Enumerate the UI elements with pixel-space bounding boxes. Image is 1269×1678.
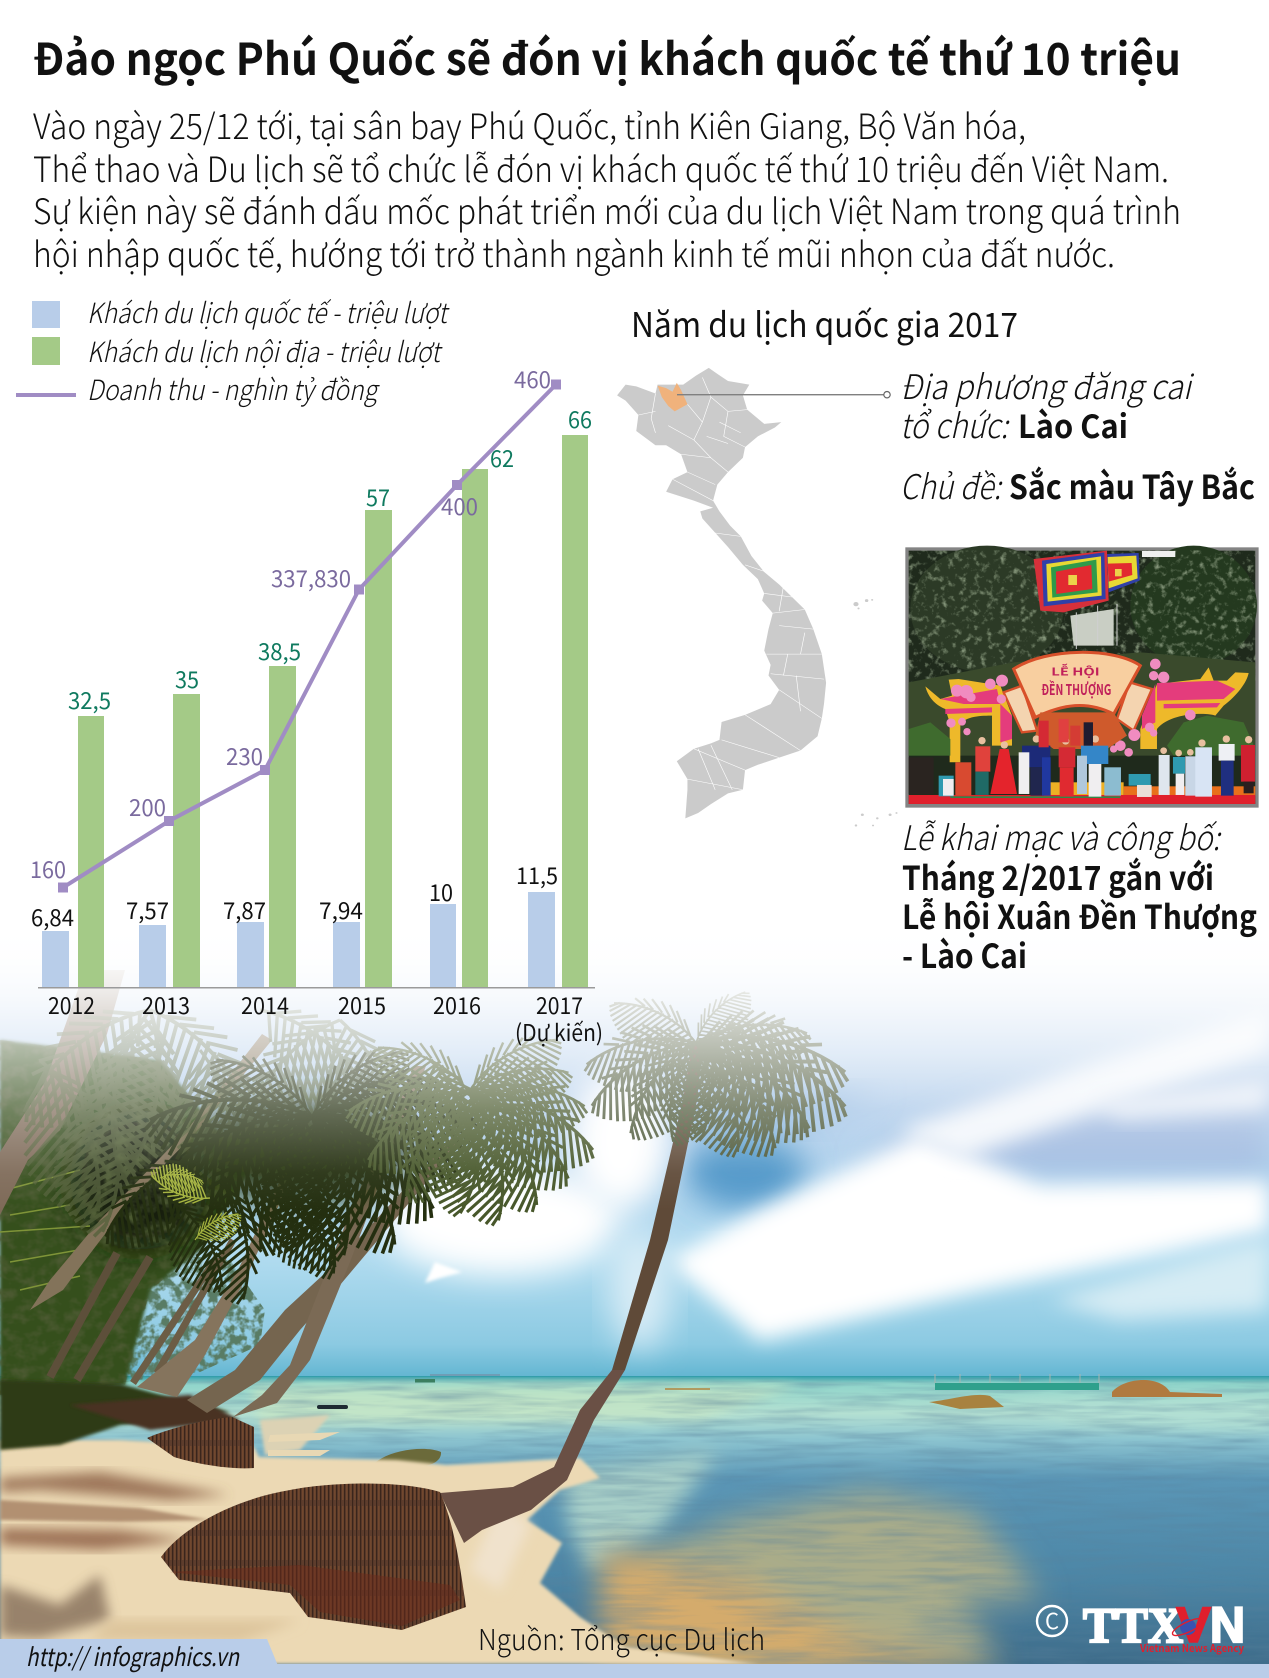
international labels: 7,87 bbox=[223, 892, 266, 926]
year labels: 2014 bbox=[241, 987, 289, 1021]
intro paragraph: hội nhập quốc tế, hướng tới trở thành ngành kinh tế mũi nhọn của đất nước. bbox=[33, 227, 1115, 278]
international labels: 10 bbox=[429, 874, 453, 908]
palm trunks bbox=[0, 970, 703, 1543]
domestic labels: 38,5 bbox=[258, 633, 301, 667]
beach sand bbox=[0, 1415, 760, 1664]
festival gate: ĐỀN THƯỢNG bbox=[1041, 679, 1111, 700]
year labels: 2015 bbox=[338, 987, 386, 1021]
TTXVN logo: N bbox=[1210, 1597, 1245, 1653]
theme text: Chủ đề: bbox=[900, 460, 1003, 509]
intro paragraph bbox=[33, 99, 1181, 278]
domestic labels: 62 bbox=[490, 440, 514, 474]
revenue labels: 337,830 bbox=[271, 560, 351, 594]
map landmass bbox=[617, 368, 826, 818]
opening ceremony text: - Lào Cai bbox=[902, 930, 1027, 978]
white fade into the page bbox=[0, 900, 1269, 1220]
website tab: http:// infographics.vn bbox=[26, 1638, 240, 1674]
chart legend bbox=[16, 292, 450, 409]
international labels: 11,5 bbox=[516, 857, 558, 891]
sky bbox=[0, 900, 1269, 1380]
year labels: 2017 bbox=[536, 987, 583, 1021]
revenue labels: 460 bbox=[514, 361, 551, 395]
heading: national tourism year: Năm du lịch quốc gia 2017 bbox=[631, 298, 1018, 347]
performers and red stage bbox=[909, 719, 1255, 804]
revenue labels: 400 bbox=[441, 488, 478, 522]
host province text bbox=[900, 360, 1195, 448]
revenue line bbox=[58, 380, 561, 892]
map of Vietnam bbox=[617, 368, 898, 827]
festival gate bbox=[909, 652, 1255, 762]
year labels bbox=[48, 987, 603, 1048]
year labels: (Dự kiến) bbox=[515, 1014, 603, 1048]
domestic labels: 57 bbox=[366, 479, 390, 513]
host province text: Địa phương đăng cai bbox=[900, 360, 1195, 409]
host province text: tổ chức: bbox=[900, 399, 1010, 448]
legend: revenue: Doanh thu - nghìn tỷ đồng bbox=[87, 369, 380, 409]
theme text bbox=[900, 460, 1255, 509]
TTXVN logo bbox=[1037, 1597, 1245, 1656]
opening ceremony text: Tháng 2/2017 gắn với bbox=[902, 852, 1214, 900]
TTXVN logo: Vietnam News Agency bbox=[1139, 1641, 1244, 1656]
source footer band bbox=[0, 1664, 1269, 1678]
domestic labels: 35 bbox=[175, 661, 199, 695]
revenue labels bbox=[30, 361, 551, 885]
rocks bbox=[317, 1379, 1222, 1467]
left forest bbox=[0, 1040, 270, 1450]
host province text: Lào Cai bbox=[1018, 402, 1128, 448]
festival photo bbox=[905, 546, 1259, 808]
blue bars: international visitors bbox=[42, 892, 555, 988]
root mounds bbox=[147, 1417, 466, 1630]
domestic labels bbox=[68, 401, 592, 716]
combo chart: visitors and revenue 2012-2017 bbox=[30, 361, 603, 1048]
TTXVN logo: C bbox=[1045, 1604, 1059, 1636]
festival gate: LỄ HỘI bbox=[1051, 663, 1100, 679]
international labels: 7,94 bbox=[319, 892, 363, 926]
background: Phu Quoc beach photo bbox=[0, 900, 1269, 1678]
crown: left, washed bbox=[0, 985, 433, 1242]
TTXVN logo: V bbox=[1176, 1597, 1212, 1653]
x axis bbox=[38, 987, 595, 988]
domestic labels: 32,5 bbox=[68, 682, 111, 716]
international labels: 6,84 bbox=[31, 899, 74, 933]
crown: right of centre bbox=[347, 1013, 608, 1235]
domestic labels: 66 bbox=[568, 401, 592, 435]
revenue labels: 230 bbox=[226, 738, 263, 772]
trees and sky bbox=[909, 546, 1257, 756]
intro paragraph: Vào ngày 25/12 tới, tại sân bay Phú Quốc, tỉnh Kiên Giang, Bộ Văn hóa, bbox=[33, 99, 1026, 150]
international labels: 7,57 bbox=[126, 892, 169, 926]
islands bbox=[853, 599, 898, 827]
green bars: domestic visitors bbox=[78, 435, 588, 988]
intro paragraph: Sự kiện này sẽ đánh dấu mốc phát triển mới của du lịch Việt Nam trong quá trình bbox=[33, 184, 1181, 235]
sea bbox=[0, 1374, 1269, 1670]
revenue labels: 200 bbox=[129, 789, 166, 823]
source: Nguồn: Tổng cục Du lịch bbox=[478, 1617, 765, 1659]
year labels: 2012 bbox=[48, 987, 95, 1021]
title: Đảo ngọc Phú Quốc sẽ đón vị khách quốc tế thứ 10 triệu bbox=[33, 24, 1181, 88]
year labels: 2016 bbox=[433, 987, 481, 1021]
crown: tall palm bbox=[574, 977, 861, 1174]
revenue labels: 160 bbox=[30, 851, 66, 885]
fish farm net bbox=[935, 1374, 1099, 1390]
opening ceremony text: Lễ khai mạc và công bố: bbox=[901, 811, 1222, 860]
international labels bbox=[31, 857, 558, 933]
crown: centre dark bbox=[83, 1024, 483, 1312]
year labels: 2013 bbox=[142, 987, 190, 1021]
legend: international visitors: Khách du lịch quốc tế - triệu lượt bbox=[87, 292, 450, 332]
flags bbox=[1034, 551, 1140, 649]
intro paragraph: Thể thao và Du lịch sẽ tổ chức lễ đón vị khách quốc tế thứ 10 triệu đến Việt Nam. bbox=[33, 142, 1169, 193]
crown: sunlit fronds bbox=[146, 1159, 248, 1256]
palm crowns bbox=[0, 977, 861, 1312]
opening ceremony text bbox=[901, 811, 1257, 978]
TTXVN logo: TTX bbox=[1083, 1597, 1183, 1653]
callout line to Lào Cai bbox=[677, 392, 890, 398]
Lào Cai province bbox=[658, 383, 687, 411]
legend: domestic visitors: Khách du lịch nội địa - triệu lượt bbox=[87, 331, 443, 371]
